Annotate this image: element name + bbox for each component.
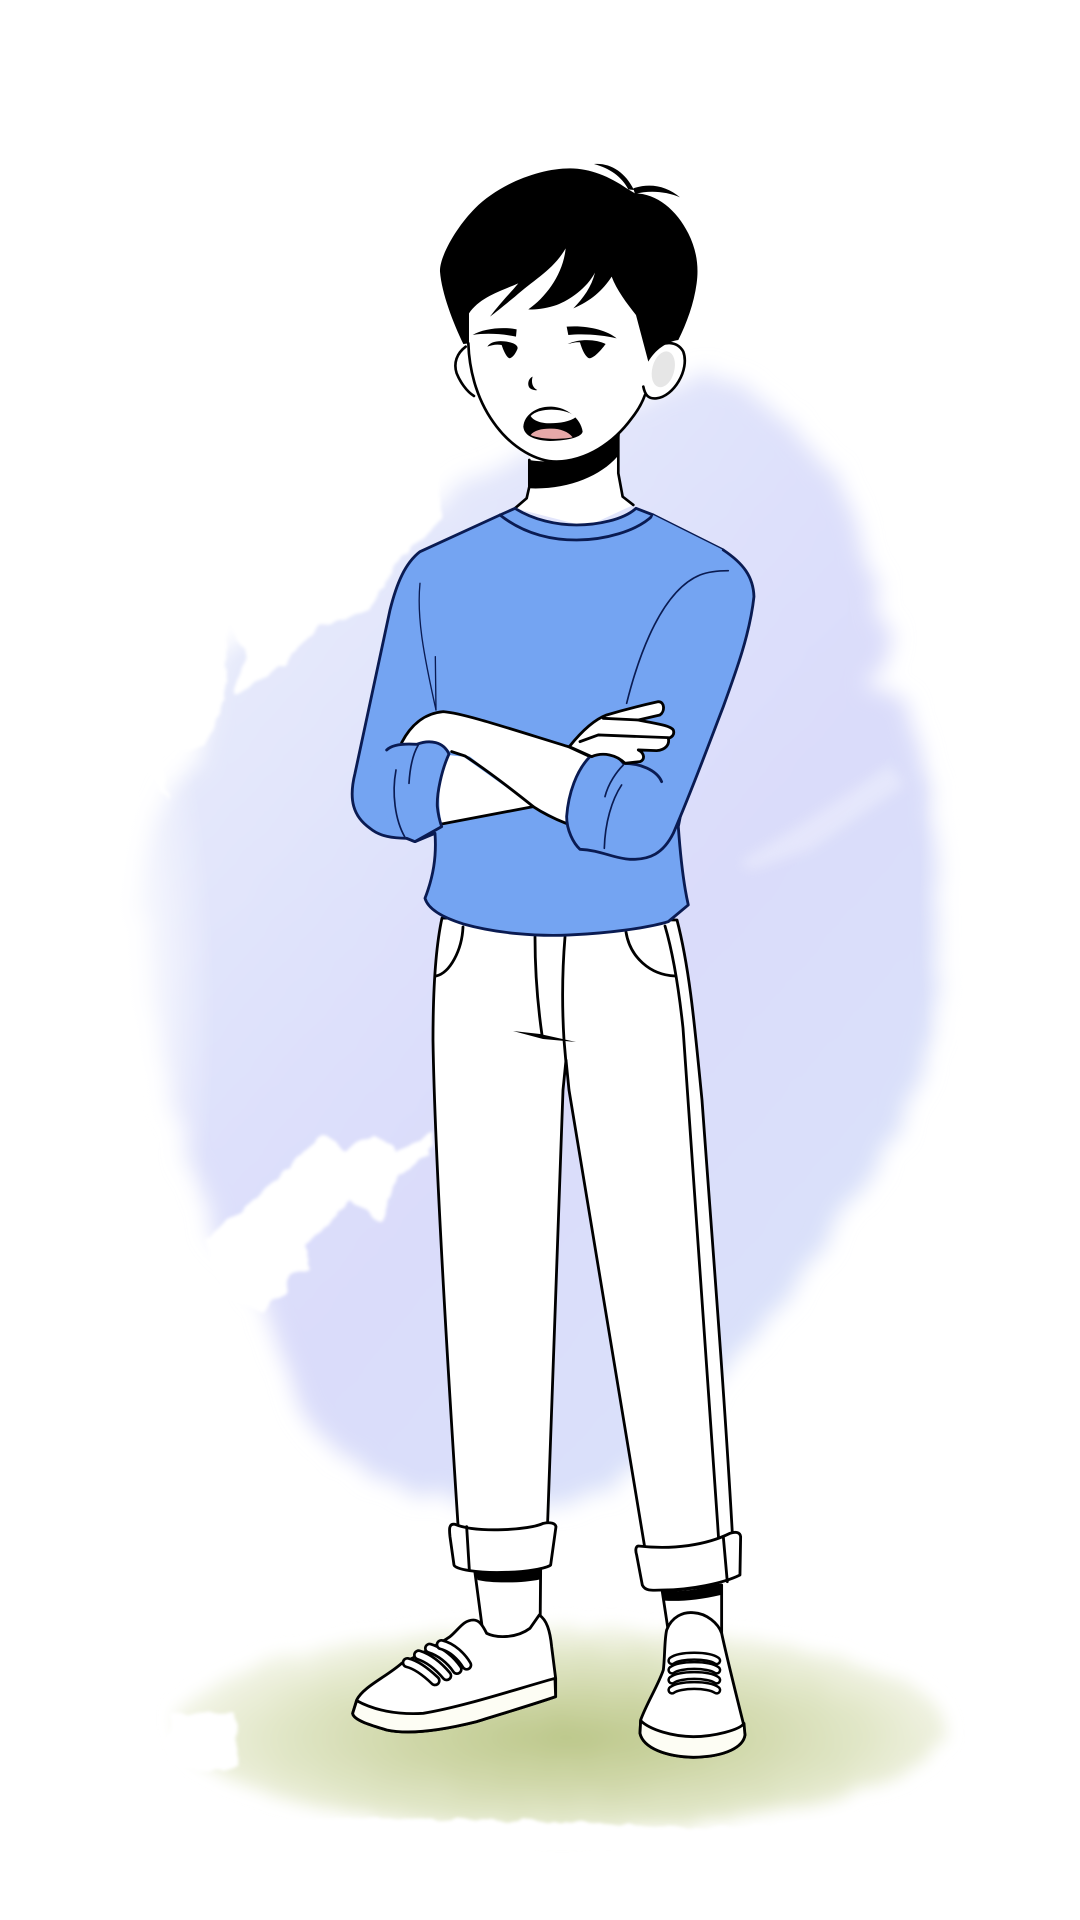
background: blue watercolor wash xyxy=(90,372,1060,1506)
right cuff folds xyxy=(604,765,623,848)
sweater body and left sleeve xyxy=(352,508,723,935)
background: olive ground wash xyxy=(165,1626,950,1860)
left ear xyxy=(455,347,474,396)
right ear xyxy=(643,343,685,398)
left shoe laces xyxy=(407,1645,467,1681)
hand over sleeve xyxy=(569,702,674,763)
face xyxy=(468,273,648,462)
left eye xyxy=(487,341,518,358)
trouser cuffs xyxy=(450,1523,741,1590)
trouser side stripe xyxy=(665,926,719,1545)
left shoe xyxy=(353,1615,556,1732)
sweater collar xyxy=(500,515,653,540)
figure: boy xyxy=(352,164,754,1757)
nose xyxy=(528,377,537,390)
hair xyxy=(440,168,697,362)
left shoe sole xyxy=(353,1678,556,1732)
lower forearm xyxy=(439,755,533,823)
sweater xyxy=(352,508,754,935)
right sleeve xyxy=(567,515,754,859)
neck xyxy=(515,427,633,527)
trouser pockets xyxy=(436,927,675,976)
right sleeve seam xyxy=(627,571,728,703)
right shoe xyxy=(640,1613,745,1757)
trouser fly xyxy=(535,937,566,1063)
upper forearm xyxy=(402,712,590,823)
right eye xyxy=(568,340,606,358)
inner ear shade xyxy=(648,349,679,390)
trousers xyxy=(433,918,733,1555)
neck shadow xyxy=(529,433,620,488)
socks xyxy=(475,1568,723,1653)
mouth xyxy=(523,407,583,441)
sweater fold lines xyxy=(419,583,436,710)
left cuff folds xyxy=(394,745,418,837)
right shoe sole xyxy=(640,1721,745,1757)
trouser crease xyxy=(513,1031,576,1042)
right shoe laces xyxy=(672,1656,717,1690)
forearm outlines xyxy=(402,712,590,824)
right eyebrow xyxy=(567,326,617,338)
left eyebrow xyxy=(473,328,517,337)
hair strands xyxy=(594,164,680,197)
left sleeve cuff xyxy=(370,742,449,842)
head xyxy=(440,164,697,462)
